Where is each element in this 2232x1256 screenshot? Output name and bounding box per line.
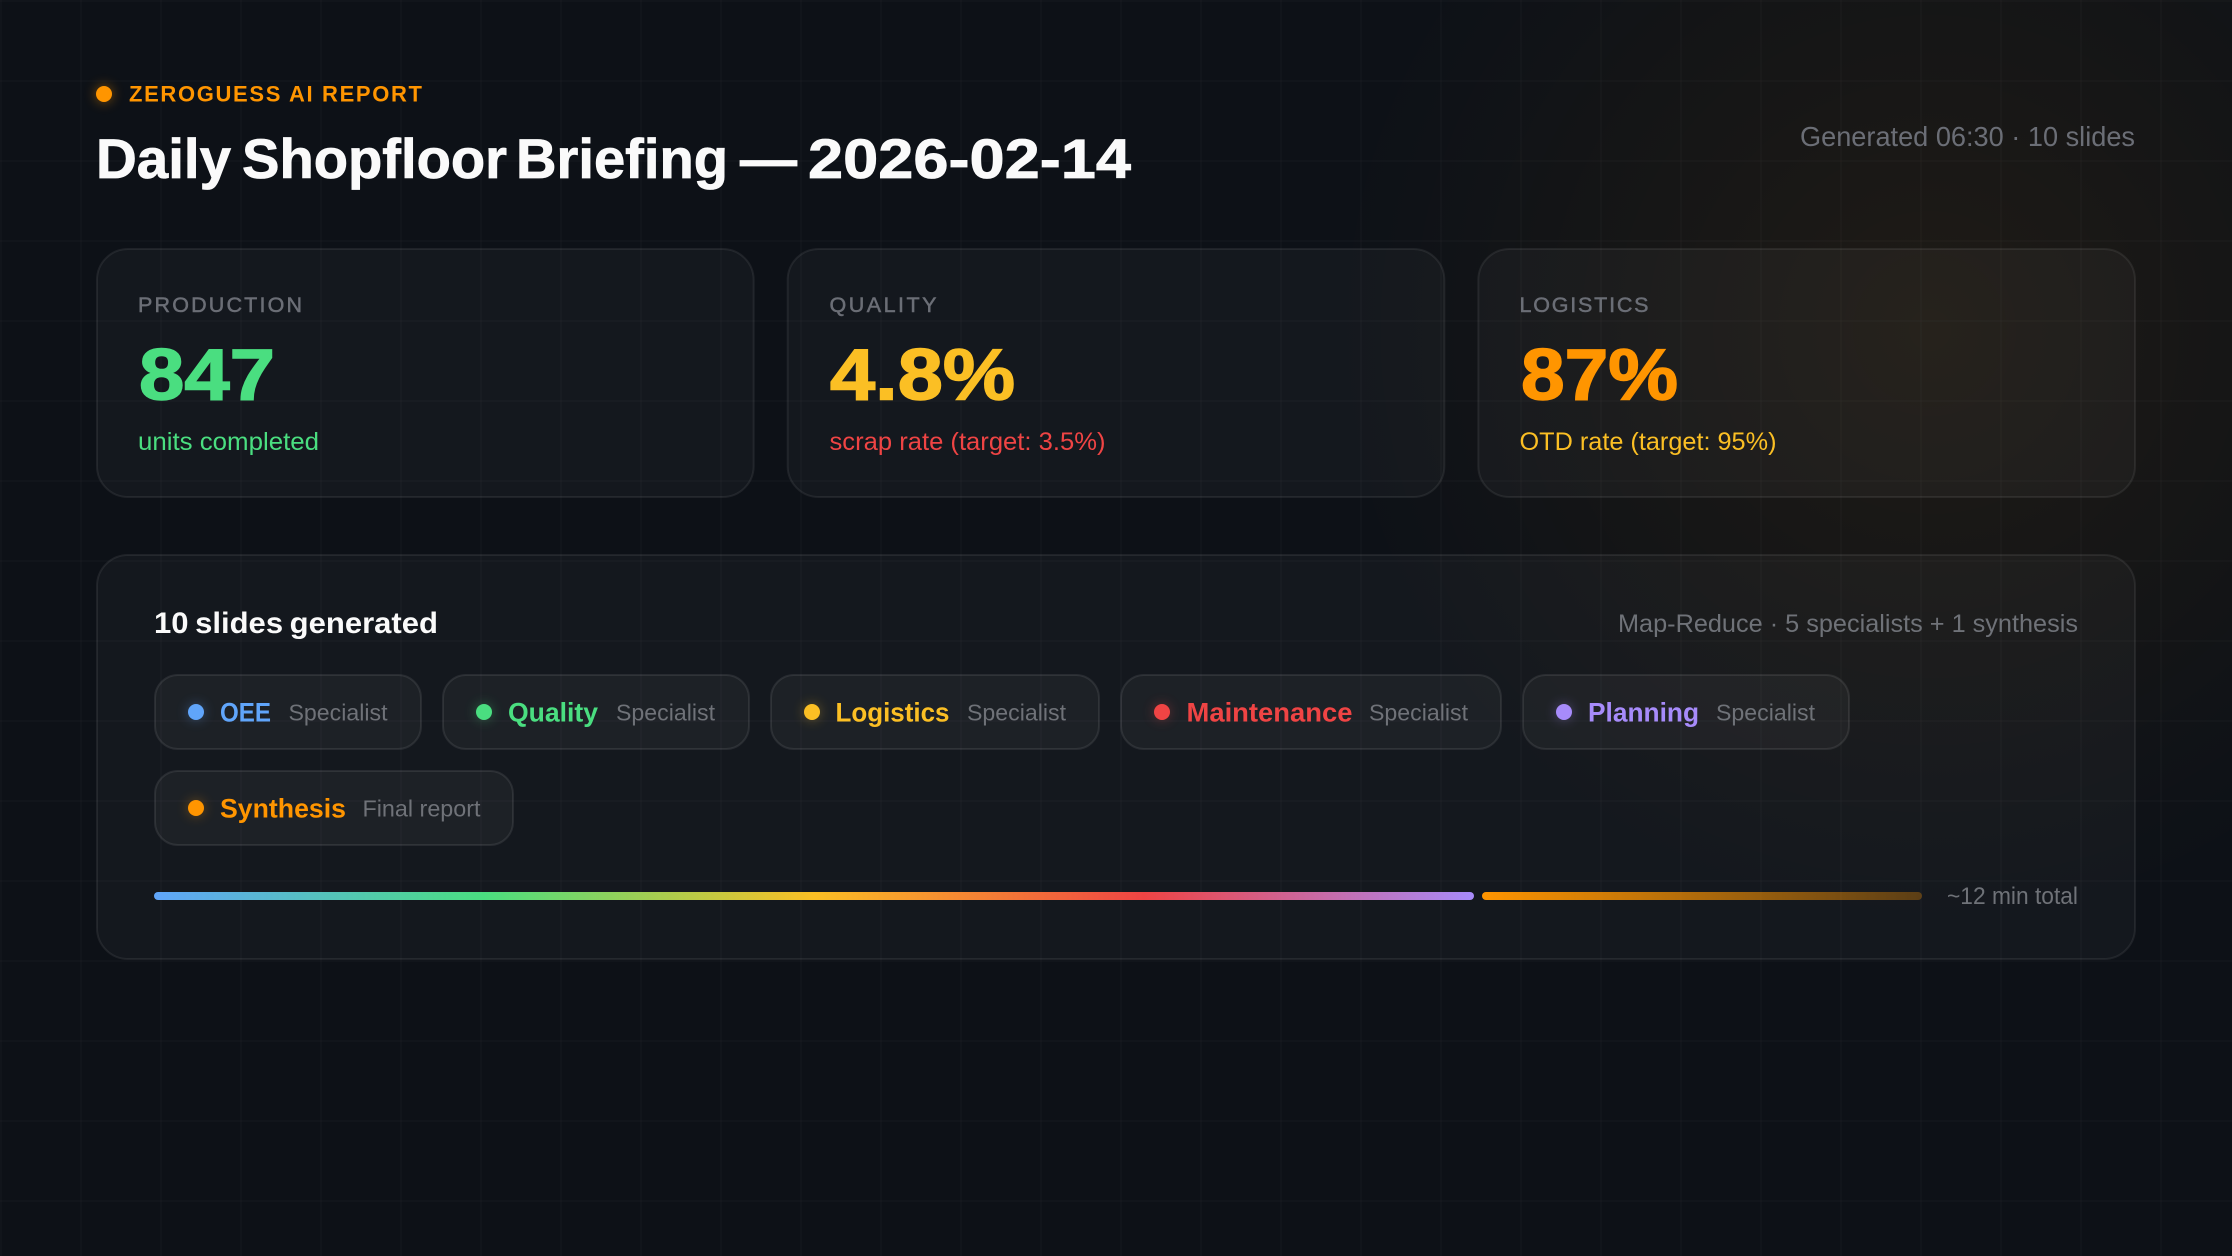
- logistics note: OTD rate (target: 95%): [1520, 428, 1776, 456]
- quality value: 4.8%: [830, 336, 1015, 416]
- warm glow top right: [1200, 0, 2232, 1000]
- generated meta: Generated 06:30 · 10 slides: [1800, 121, 2135, 152]
- quality note: scrap rate (target: 3.5%): [830, 428, 1106, 456]
- production note: units completed: [138, 428, 319, 456]
- production label: PRODUCTION: [138, 293, 302, 317]
- chip: Planning: Planning: [1588, 698, 1699, 728]
- timeline total: ~12 min total: [1947, 883, 2078, 910]
- chip: Logistics: Specialist: [967, 700, 1067, 726]
- chip: Logistics: Logistics: [836, 698, 950, 728]
- panel: production: [97, 249, 754, 497]
- title: 2026-02-14: [808, 127, 1131, 190]
- title: Briefing: [516, 127, 728, 190]
- chip: OEE: [155, 675, 421, 749]
- title: Shopfloor: [242, 127, 507, 190]
- chip: Planning: [1523, 675, 1849, 749]
- chip: Maintenance: Specialist: [1369, 700, 1469, 726]
- chip: Quality: [443, 675, 749, 749]
- title: Daily: [96, 127, 231, 190]
- panel: quality: [788, 249, 1444, 497]
- panel meta: Map-Reduce · 5 specialists + 1 synthesis: [1618, 610, 2078, 638]
- chip: Synthesis: Synthesis: [220, 794, 346, 824]
- quality label: QUALITY: [830, 293, 936, 317]
- chip: Quality: Specialist: [616, 700, 716, 726]
- chip: Synthesis: Final report: [362, 796, 481, 822]
- header eyebrow: ZEROGUESS AI REPORT: [129, 82, 423, 106]
- timeline bar: specialists: [154, 892, 1474, 900]
- panel heading: 10 slides generated: [154, 607, 438, 640]
- chip: Synthesis: [155, 771, 513, 845]
- chip: Maintenance: [1121, 675, 1501, 749]
- chip: Logistics: [771, 675, 1099, 749]
- panel: slides generated: [97, 555, 2135, 959]
- chip: Maintenance: Maintenance: [1186, 698, 1352, 728]
- panel: logistics: [1478, 249, 2135, 497]
- production value: 847: [139, 336, 275, 416]
- title: —: [740, 127, 797, 190]
- chip: Planning: Specialist: [1716, 700, 1816, 726]
- chip: OEE: Specialist: [288, 700, 388, 726]
- chip: OEE: OEE: [220, 698, 271, 728]
- timeline bar: synthesis: [1482, 892, 1922, 900]
- chip: Quality: Quality: [508, 698, 598, 728]
- logistics value: 87%: [1521, 336, 1678, 416]
- logistics label: LOGISTICS: [1520, 293, 1648, 317]
